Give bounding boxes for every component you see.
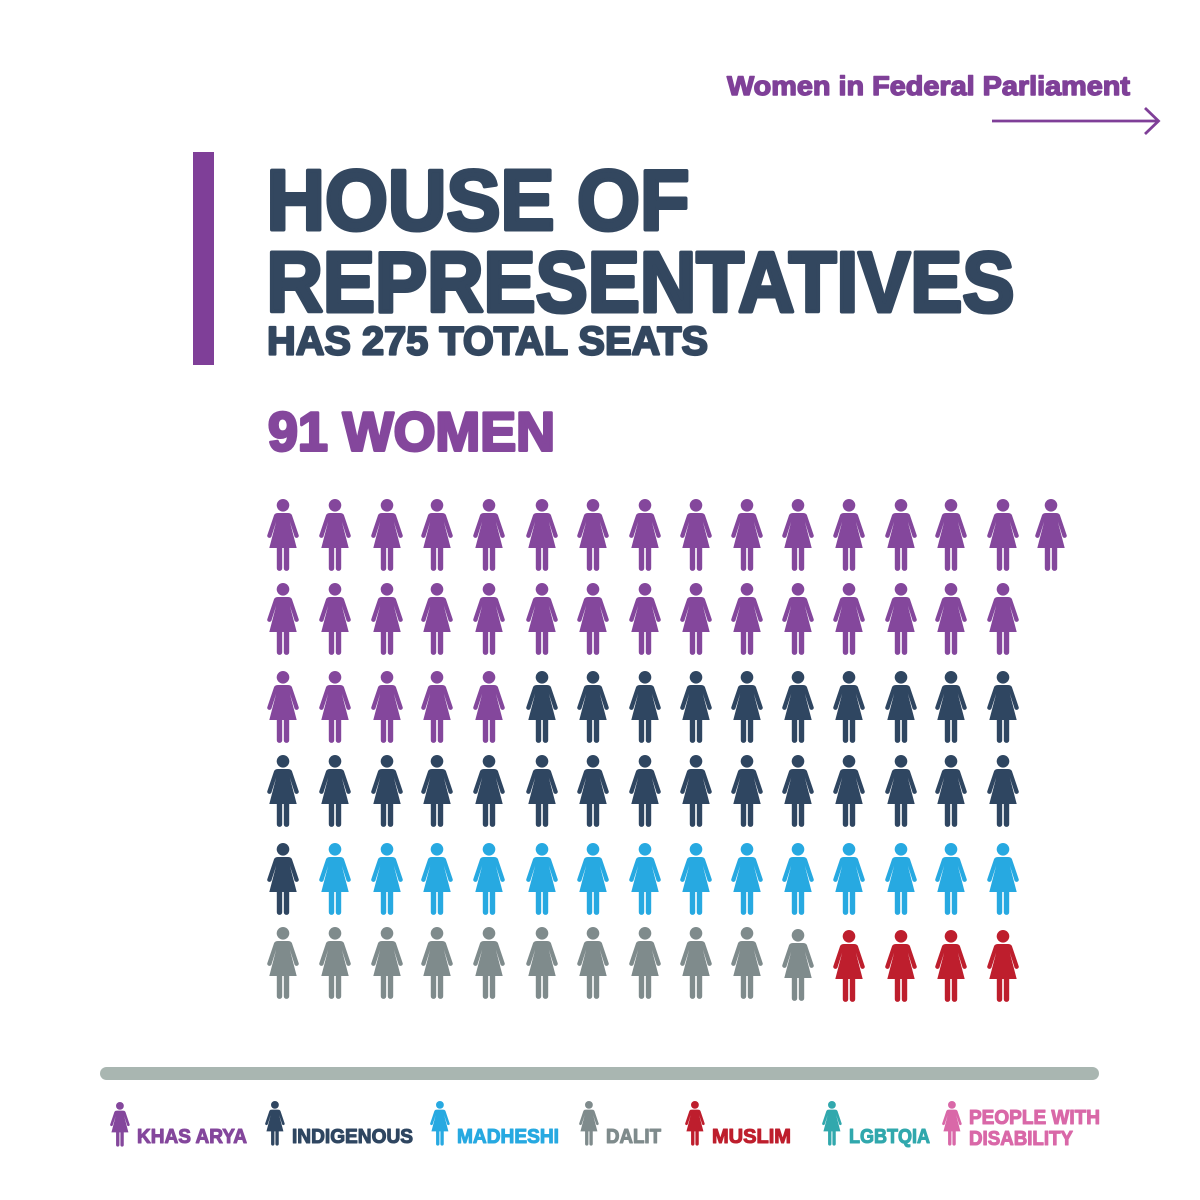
legend: People with Disability: DISABILITY <box>969 1127 1073 1150</box>
arrow <box>992 108 1158 134</box>
row 5: Madheshi <box>319 843 1019 915</box>
legend: Indigenous: INDIGENOUS <box>292 1125 413 1148</box>
legend: Madheshi: MADHESHI <box>457 1125 559 1148</box>
row 1: Khas Arya <box>267 499 1067 571</box>
legend: Khas Arya: KHAS ARYA <box>137 1125 247 1148</box>
row 6: Muslim <box>833 930 1019 1002</box>
women count: 91 WOMEN <box>268 400 555 462</box>
row 4: Indigenous <box>267 755 1019 827</box>
legend <box>110 1101 1100 1150</box>
row 6: Dalit <box>267 927 814 1001</box>
legend: People with Disability: PEOPLE WITH <box>969 1106 1100 1129</box>
legend: Khas Arya <box>110 1102 247 1148</box>
legend: People with Disability <box>942 1101 1100 1150</box>
legend: LGBTQIA <box>822 1101 930 1148</box>
row 5: Indigenous <box>267 843 299 915</box>
row 3: Khas Arya <box>267 671 505 743</box>
divider bar <box>100 1067 1099 1080</box>
row 3: Indigenous <box>526 671 1019 743</box>
accent bar <box>193 152 214 365</box>
pictogram chart: 91 women <box>267 499 1067 1002</box>
title: REPRESENTATIVES <box>266 236 1014 330</box>
legend: Dalit <box>579 1101 661 1148</box>
subtitle: HAS 275 TOTAL SEATS <box>267 320 708 364</box>
legend: Madheshi <box>430 1101 559 1148</box>
legend: Indigenous <box>265 1101 413 1148</box>
legend: LGBTQIA: LGBTQIA <box>849 1125 930 1148</box>
legend: Dalit: DALIT <box>606 1125 661 1148</box>
row 2: Khas Arya <box>267 583 1019 655</box>
legend: Muslim <box>685 1101 791 1148</box>
title: HOUSE OF <box>266 154 690 248</box>
section label: Women in Federal Parliament: Women in Federal Parliament <box>727 71 1130 101</box>
legend: Muslim: MUSLIM <box>712 1125 791 1148</box>
title <box>266 154 1014 330</box>
